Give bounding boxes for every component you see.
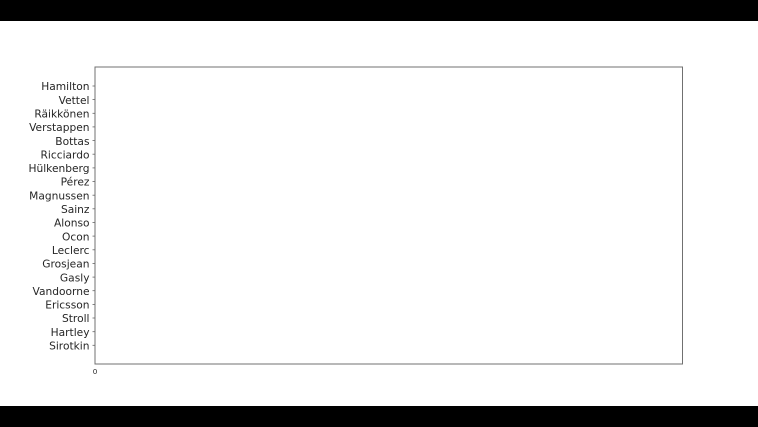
y axis driver labels: Alonso — [54, 217, 90, 230]
y axis driver labels: Ricciardo — [41, 148, 90, 161]
bottom black bar — [0, 406, 758, 427]
y axis driver labels: Hülkenberg — [28, 162, 90, 175]
y axis driver labels: Pérez — [61, 176, 90, 189]
y axis driver labels: Bottas — [55, 135, 90, 148]
chart plot frame — [95, 67, 682, 364]
y axis driver labels: Stroll — [62, 312, 90, 325]
y axis driver labels: Grosjean — [42, 258, 90, 271]
top black bar — [0, 0, 758, 21]
y axis driver labels: Sirotkin — [49, 340, 90, 352]
y axis driver labels: Vandoorne — [33, 285, 90, 298]
y axis driver labels: Hamilton — [41, 80, 90, 93]
y axis driver labels: Räikkönen — [34, 108, 90, 120]
y axis driver labels: Gasly — [60, 271, 90, 284]
y axis driver labels: Vettel — [59, 94, 90, 107]
y axis driver labels: Ericsson — [45, 299, 90, 312]
y axis driver labels: Sainz — [61, 203, 90, 216]
y axis driver labels: Hartley — [51, 326, 90, 339]
y axis tick marks — [92, 86, 95, 345]
y axis driver labels: Ocon — [62, 230, 90, 243]
y axis driver labels: Magnussen — [29, 189, 90, 202]
y axis driver labels: Leclerc — [52, 244, 90, 257]
y axis driver labels — [28, 80, 90, 352]
x axis zero tick label: 0 — [93, 367, 98, 376]
y axis driver labels: Verstappen — [29, 121, 90, 134]
